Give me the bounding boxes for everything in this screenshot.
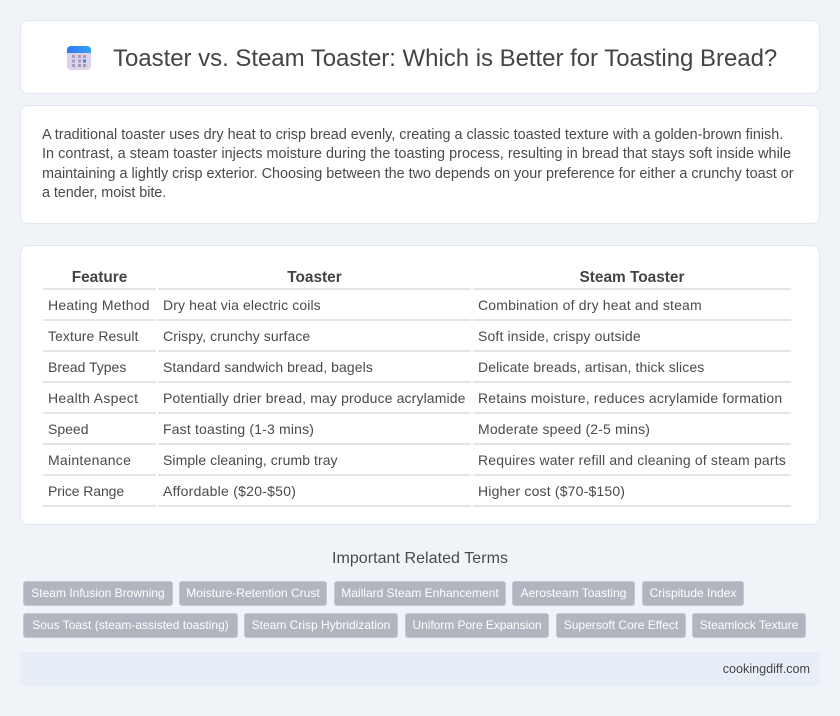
- tag: Moisture-Retention Crust: [186, 586, 320, 600]
- intro paragraph: In contrast, a steam toaster injects moisture during the toasting process, resulting in bread that stays soft inside while: [42, 146, 791, 162]
- heading: related terms: Important Related Terms: [332, 550, 508, 567]
- intro paragraph: a tender, moist bite.: [42, 185, 166, 201]
- row: health aspect: Health Aspect: [48, 390, 138, 406]
- intro paragraph: [42, 126, 794, 201]
- tag list: [23, 581, 806, 638]
- tag: Crispitude Index: [650, 586, 736, 600]
- panel: comparison table: Steam Toaster: [580, 269, 684, 286]
- table header: Feature: [72, 269, 127, 286]
- panel: comparison table: Moderate speed (2-5 mins): [478, 421, 650, 437]
- tag: [556, 613, 686, 638]
- tag: [23, 581, 173, 606]
- tag: [334, 581, 506, 606]
- row: heating method: Heating Method: [48, 297, 150, 313]
- tag: [405, 613, 549, 638]
- panel: comparison table: Requires water refill and cleaning of steam parts: [478, 452, 786, 468]
- panel: comparison table: Dry heat via electric coils: [163, 297, 321, 313]
- row: bread types: Bread Types: [48, 359, 126, 375]
- panel: comparison table: [20, 245, 820, 525]
- tag: Steamlock Texture: [700, 618, 798, 632]
- panel: comparison table: Soft inside, crispy outside: [478, 328, 641, 344]
- intro paragraph: maintaining a lightly crisp exterior. Choosing between the two depends on your preference for either a crunchy toast or: [42, 166, 794, 182]
- tag: Uniform Pore Expansion: [413, 618, 541, 632]
- row: speed: Speed: [48, 421, 88, 437]
- tag: Maillard Steam Enhancement: [341, 586, 499, 600]
- tag: Aerosteam Toasting: [521, 586, 626, 600]
- panel: comparison table: Crispy, crunchy surface: [163, 328, 310, 344]
- panel: comparison table: Simple cleaning, crumb tray: [163, 452, 338, 468]
- panel: comparison table: Higher cost ($70-$150): [478, 483, 625, 499]
- tag: [642, 581, 744, 606]
- row: price range: Price Range: [48, 483, 124, 499]
- tag: [23, 613, 238, 638]
- panel: comparison table: Affordable ($20-$50): [163, 483, 296, 499]
- tag: Sous Toast (steam-assisted toasting): [32, 618, 229, 632]
- tag: [692, 613, 806, 638]
- row: texture result: Texture Result: [48, 328, 138, 344]
- tag: [179, 581, 327, 606]
- tag: [244, 613, 398, 638]
- panel: comparison table: Combination of dry heat and steam: [478, 297, 702, 313]
- panel: comparison table: Standard sandwich bread, bagels: [163, 359, 373, 375]
- panel: comparison table: Retains moisture, reduces acrylamide formation: [478, 390, 782, 406]
- tag: Steam Crisp Hybridization: [252, 618, 390, 632]
- footer: [20, 652, 820, 686]
- intro paragraph: A traditional toaster uses dry heat to crisp bread evenly, creating a classic toasted texture with a golden-brown finish.: [42, 126, 783, 142]
- tag: Supersoft Core Effect: [564, 618, 678, 632]
- tag: Steam Infusion Browning: [31, 586, 165, 600]
- panel: comparison table: Delicate breads, artisan, thick slices: [478, 359, 704, 375]
- panel: title: [20, 20, 820, 94]
- row: maintenance: Maintenance: [48, 452, 131, 468]
- panel: comparison table: Toaster: [287, 269, 342, 286]
- panel: comparison table: Potentially drier bread, may produce acrylamide: [163, 390, 466, 406]
- panel: comparison table: Fast toasting (1-3 mins): [163, 421, 314, 437]
- footer source: cookingdiff.com: [723, 662, 810, 676]
- title text: Toaster vs. Steam Toaster: Which is Better for Toasting Bread?: [113, 45, 777, 72]
- panel: intro: [20, 105, 820, 224]
- tag: [512, 581, 635, 606]
- icon: calendar: [67, 46, 91, 70]
